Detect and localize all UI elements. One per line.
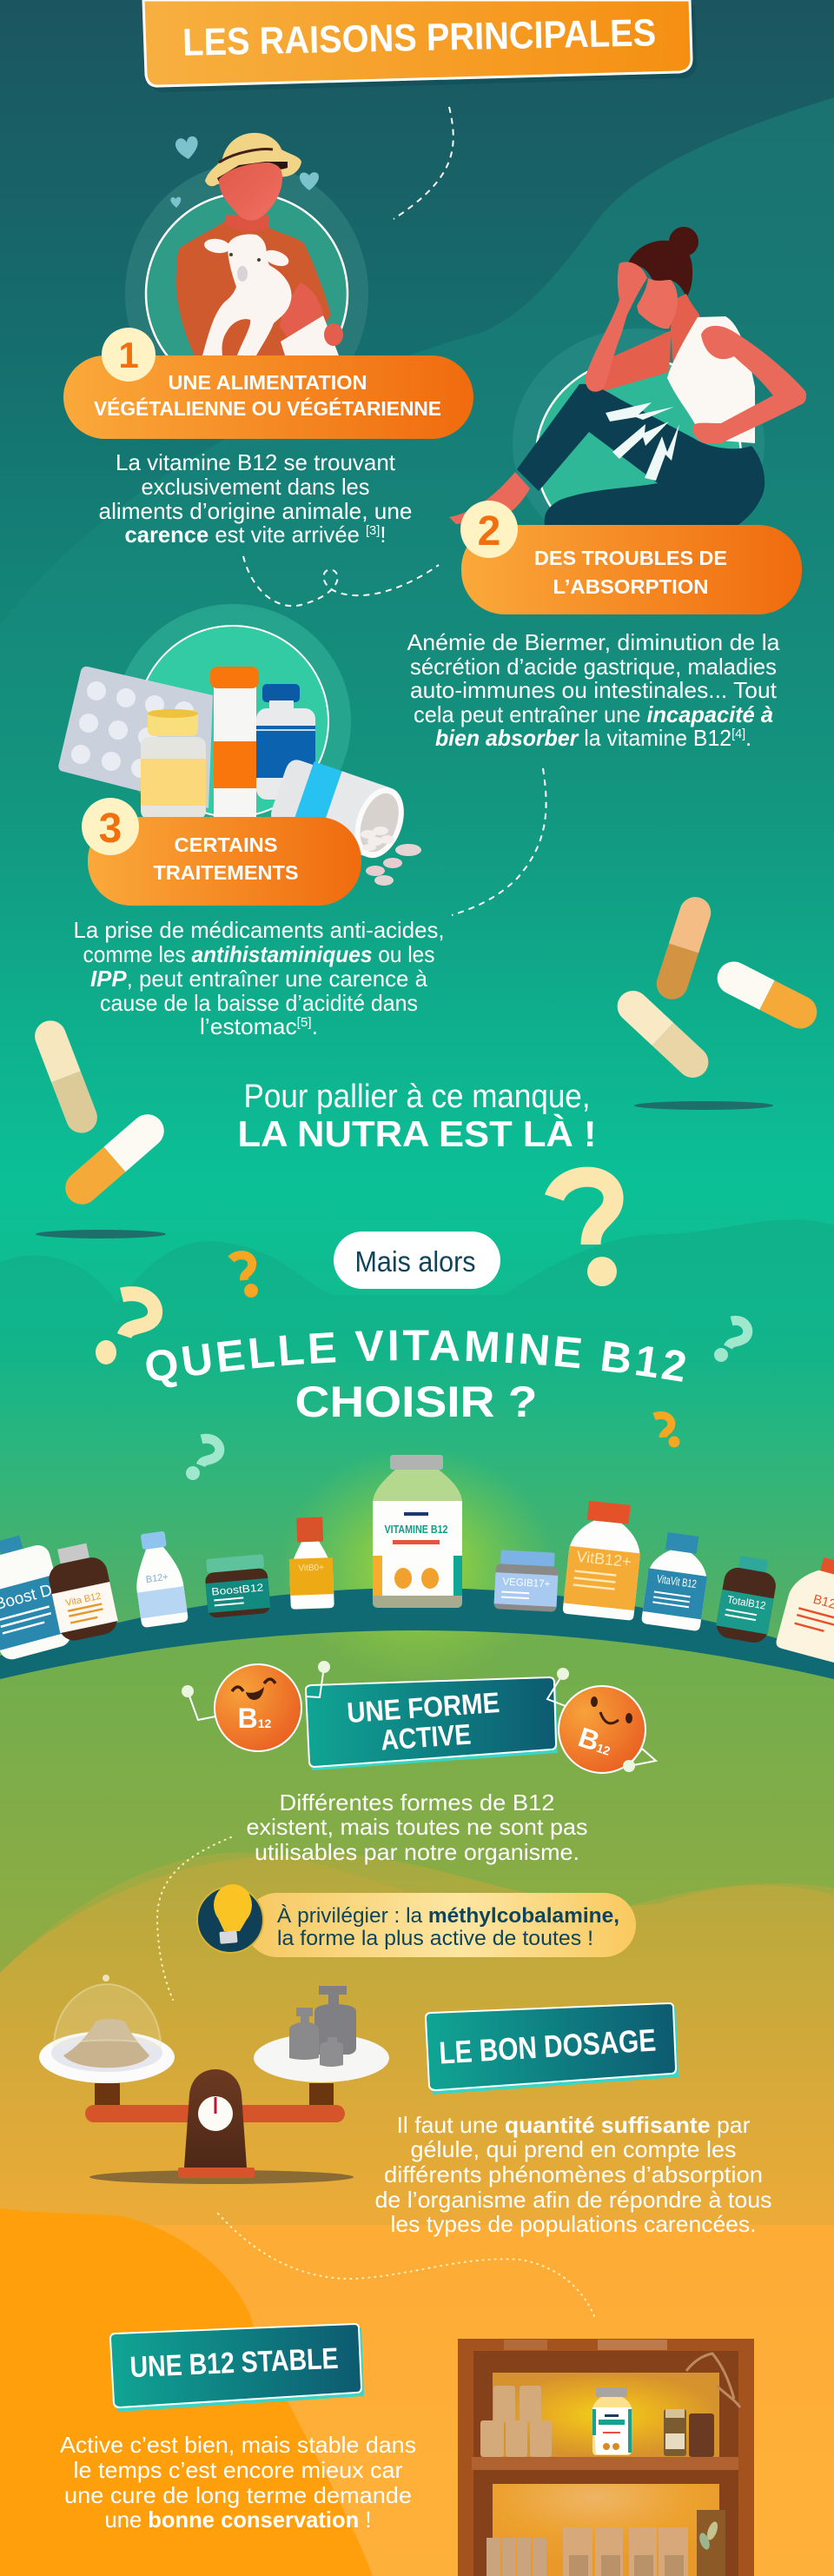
text block 3: comme les antihistaminiques ou les [83, 941, 434, 967]
text block 3: . [312, 1013, 318, 1039]
dashed connector 1 [394, 107, 453, 219]
text block: stable: une bonne conservation ! [105, 2506, 372, 2533]
bottle: VitB0+ [288, 1517, 334, 1610]
illustration: scale [39, 1975, 389, 2184]
bottle: BoostB12 jar [203, 1554, 271, 1618]
title banner [143, 0, 697, 92]
callout: la nutra est là: Pour pallier à ce manque, [243, 1079, 591, 1115]
panel: cause 3 [58, 604, 444, 1039]
heading: quelle vitamine b12 choisir [146, 1330, 685, 1426]
text block 2: sécrétion d’acide gastrique, maladies [410, 654, 777, 680]
heading: quelle vitamine b12 choisir: CHOISIR ? [295, 1378, 537, 1426]
sticker: une forme active: UNE FORME [346, 1686, 500, 1729]
pill: mais alors [334, 1232, 500, 1289]
panel: cause 1 [63, 133, 473, 548]
sticker: une b12 stable: UNE B12 STABLE [129, 2342, 339, 2384]
bottles row [0, 1455, 834, 1664]
panel: une forme active [182, 1661, 656, 1865]
text block: stable [60, 2432, 416, 2533]
badge 2 [460, 501, 518, 558]
text block 1: aliments d’origine animale, une [99, 498, 412, 524]
callout: à privilégier: À privilégier : la méthylcobalamine, [277, 1904, 619, 1928]
text block: dosage [375, 2112, 771, 2237]
bottle: TotalB12 [714, 1554, 780, 1644]
dashed connector 2 [452, 768, 546, 915]
heading 1: VÉGÉTALIENNE OU VÉGÉTARIENNE [94, 396, 441, 420]
spilled tablets [361, 827, 421, 886]
bottle: B12 milk [129, 1530, 189, 1628]
character: smiling B12 right: B12 [574, 1721, 617, 1762]
text block: différentes formes [247, 1789, 587, 1865]
bottle: VitB0+: VitB0+ [298, 1563, 324, 1574]
heading pill 2 [461, 525, 802, 614]
heading 1 [94, 371, 441, 420]
bottle: VitaVit B12 [641, 1530, 712, 1631]
heading pill 1 [63, 355, 473, 439]
heading 2: DES TROUBLES DE [534, 547, 727, 569]
text block: dosage: Il faut une quantité suffisante par [396, 2112, 751, 2138]
main bottle: vitamine B12: VITAMINE B12 [384, 1523, 448, 1536]
sticker: le bon dosage: LE BON DOSAGE [438, 2022, 657, 2071]
bottle: VitB12+: VitB12+ [576, 1548, 632, 1570]
text block: dosage: gélule, qui prend en compte les [410, 2136, 737, 2162]
bottle: VEGIB17+ [493, 1550, 559, 1612]
badge 1 [102, 328, 156, 382]
icon: hearts [170, 136, 319, 208]
panel: une b12 stable [60, 2324, 416, 2533]
text block 1: [3] [366, 523, 380, 538]
text block 2: cela peut entraîner une incapacité à [414, 701, 773, 727]
text block 2: bien absorber la vitamine B12 [435, 725, 738, 751]
jars lower shelf [486, 2510, 725, 2576]
text block 3: IPP, peut entraîner une carence à [90, 966, 428, 992]
heading 1: UNE ALIMENTATION [169, 371, 367, 394]
text block 2: Anémie de Biermer, diminution de la [407, 629, 780, 655]
heading 3: TRAITEMENTS [153, 861, 299, 884]
sticker: une forme active: ACTIVE [380, 1717, 472, 1756]
bottle: Vita B12 [43, 1540, 120, 1643]
arc shelf [0, 1588, 834, 1679]
illustration: shelf [458, 2339, 754, 2576]
illustration: farmer with lamb [125, 133, 368, 424]
bottle: TotalB12: TotalB12 [726, 1593, 767, 1612]
text block 1: exclusivement dans les [141, 474, 370, 500]
text block: stable: le temps c’est encore mieux car [73, 2457, 403, 2483]
text block 1 [99, 449, 412, 548]
text block: stable: Active c’est bien, mais stable dans [60, 2432, 416, 2458]
bottle: VitaVit B12: VitaVit B12 [656, 1572, 698, 1590]
bottle: VEGIB17+: VEGIB17+ [502, 1576, 551, 1590]
text block: différentes formes: existent, mais toutes ne sont pas [247, 1814, 587, 1840]
icon: light bulb [197, 1884, 263, 1953]
callout: la nutra est là: LA NUTRA EST LÀ ! [238, 1113, 596, 1154]
text block 3 [73, 917, 445, 1039]
question marks [96, 1177, 748, 1480]
sticker: une b12 stable [110, 2324, 364, 2412]
illustration: medicines [58, 604, 421, 886]
text block 2: [4] [731, 727, 745, 741]
text block 2: . [745, 725, 751, 751]
illustration: woman in pain [449, 227, 806, 558]
character: smiling B12 left: B12 [238, 1703, 272, 1734]
panel: cause 2 [407, 227, 806, 751]
icon: pain lightning [606, 402, 679, 481]
callout: la nutra est là [238, 1079, 596, 1154]
text block 1: La vitamine B12 se trouvant [116, 449, 396, 475]
dotted connector [157, 1837, 231, 2000]
text block 1: carence est vite arrivée [124, 521, 362, 548]
panel: le bon dosage [375, 2003, 771, 2237]
dashed connector loop [243, 556, 439, 606]
text block 3: cause de la baisse d’acidité dans [100, 990, 418, 1016]
heading 2 [534, 547, 727, 598]
jars top shelf [480, 2386, 714, 2457]
heading 3 [153, 833, 299, 884]
character: smiling B12 right [547, 1668, 656, 1773]
badge 2: 2 [478, 508, 500, 554]
main bottle: vitamine B12 [373, 1455, 462, 1608]
bottle: B12 cream [775, 1551, 834, 1664]
heading 2: L’ABSORPTION [553, 575, 709, 598]
sticker: une forme active [306, 1661, 558, 1770]
heading: quelle vitamine b12 choisir: QUELLE VITAMINE B12 [146, 1330, 685, 1387]
cobweb [686, 2354, 740, 2407]
bottle: BoostB12 jar: BoostB12 [211, 1581, 264, 1598]
dotted connector 2 [218, 2214, 596, 2320]
text block: dosage: de l’organisme afin de répondre à tous [375, 2187, 771, 2213]
character: smiling B12 left [182, 1664, 301, 1751]
callout: à privilégier [197, 1884, 636, 1957]
text block 3: [5] [297, 1015, 312, 1030]
text block: dosage: les types de populations carencées. [391, 2211, 756, 2237]
glow behind main bottle [278, 1447, 556, 1682]
sticker: le bon dosage [426, 2003, 678, 2095]
badge 3 [82, 798, 139, 855]
text block 3: l’estomac [200, 1013, 295, 1039]
heading pill 3 [88, 817, 361, 906]
title text: LES RAISONS PRINCIPALES [182, 11, 657, 64]
lamb [202, 235, 339, 355]
text block: différentes formes: Différentes formes de B12 [280, 1789, 554, 1816]
badge 3: 3 [99, 806, 122, 852]
heading 3: CERTAINS [174, 833, 278, 856]
main bottle on shelf [592, 2387, 632, 2455]
text block: stable: une cure de long terme demande [64, 2482, 412, 2508]
bottle: B12 milk: B12+ [145, 1572, 169, 1585]
text block 2 [407, 629, 780, 751]
pill: mais alors: Mais alors [354, 1245, 476, 1278]
text block: dosage: différents phénomènes d’absorption [384, 2161, 763, 2188]
text block 3: La prise de médicaments anti-acides, [73, 917, 445, 943]
text block: différentes formes: utilisables par notre organisme. [255, 1839, 579, 1865]
text block 2: auto-immunes ou intestinales... Tout [410, 677, 778, 703]
bottle: Boost D [0, 1529, 74, 1662]
text block 1: ! [380, 521, 386, 548]
callout: à privilégier: la forme la plus active de toutes ! [277, 1927, 593, 1950]
capsules [30, 893, 823, 1238]
bottle: VitB12+ [562, 1499, 645, 1621]
bottle: Vita B12: Vita B12 [64, 1591, 102, 1609]
badge 1: 1 [118, 335, 139, 375]
